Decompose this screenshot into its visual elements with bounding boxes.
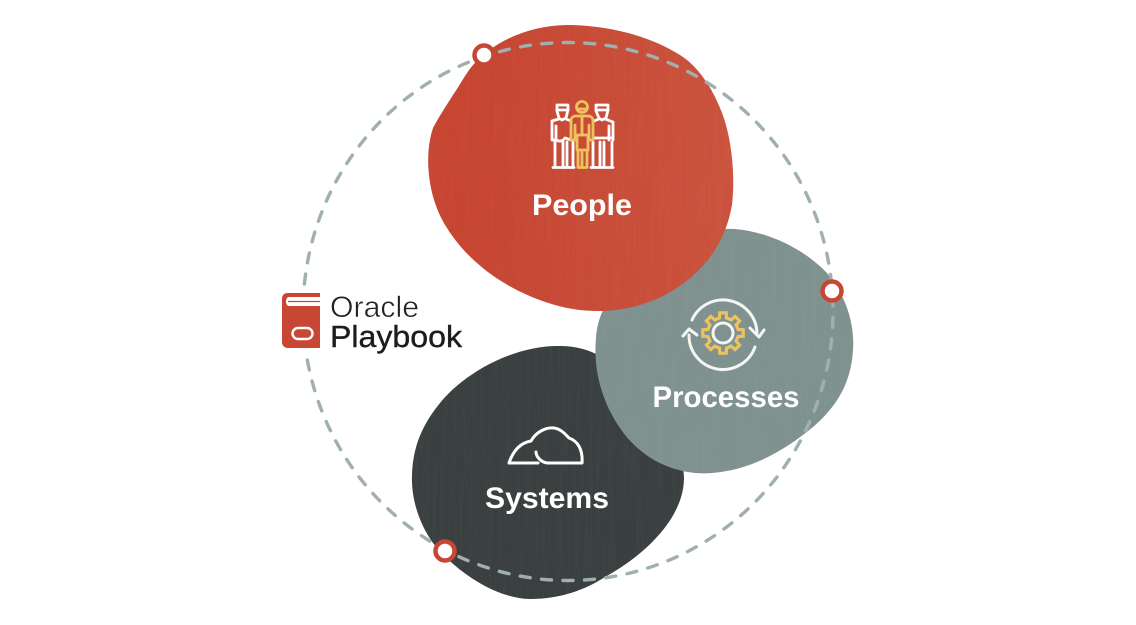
logo: Oracle Playbook: Playbook: [330, 319, 463, 354]
node: top marker: [474, 46, 494, 64]
blob: Systems: [405, 340, 690, 605]
infographic: Oracle Playbook cycle: [282, 25, 854, 599]
right person: [591, 105, 613, 168]
blob: Processes: [590, 225, 860, 477]
node: right marker: [822, 282, 842, 300]
node: bottom marker: [436, 542, 454, 560]
icon: people group: [552, 102, 613, 168]
circular arrows: [683, 300, 764, 370]
dashed cycle ring: [304, 43, 833, 581]
heading: People: People: [532, 189, 632, 222]
heading: Systems: Systems: [485, 482, 609, 515]
icon: book: [282, 293, 320, 348]
heading: Processes: Processes: [652, 381, 800, 414]
blob: People: [425, 22, 737, 314]
icon: cloud: [509, 428, 582, 463]
gear: [703, 313, 743, 353]
icon: process gear: [683, 300, 764, 370]
logo: Oracle Playbook: [282, 291, 463, 354]
wordmark: Oracle: [330, 291, 419, 324]
left person: [552, 105, 574, 168]
center person: [571, 102, 593, 168]
